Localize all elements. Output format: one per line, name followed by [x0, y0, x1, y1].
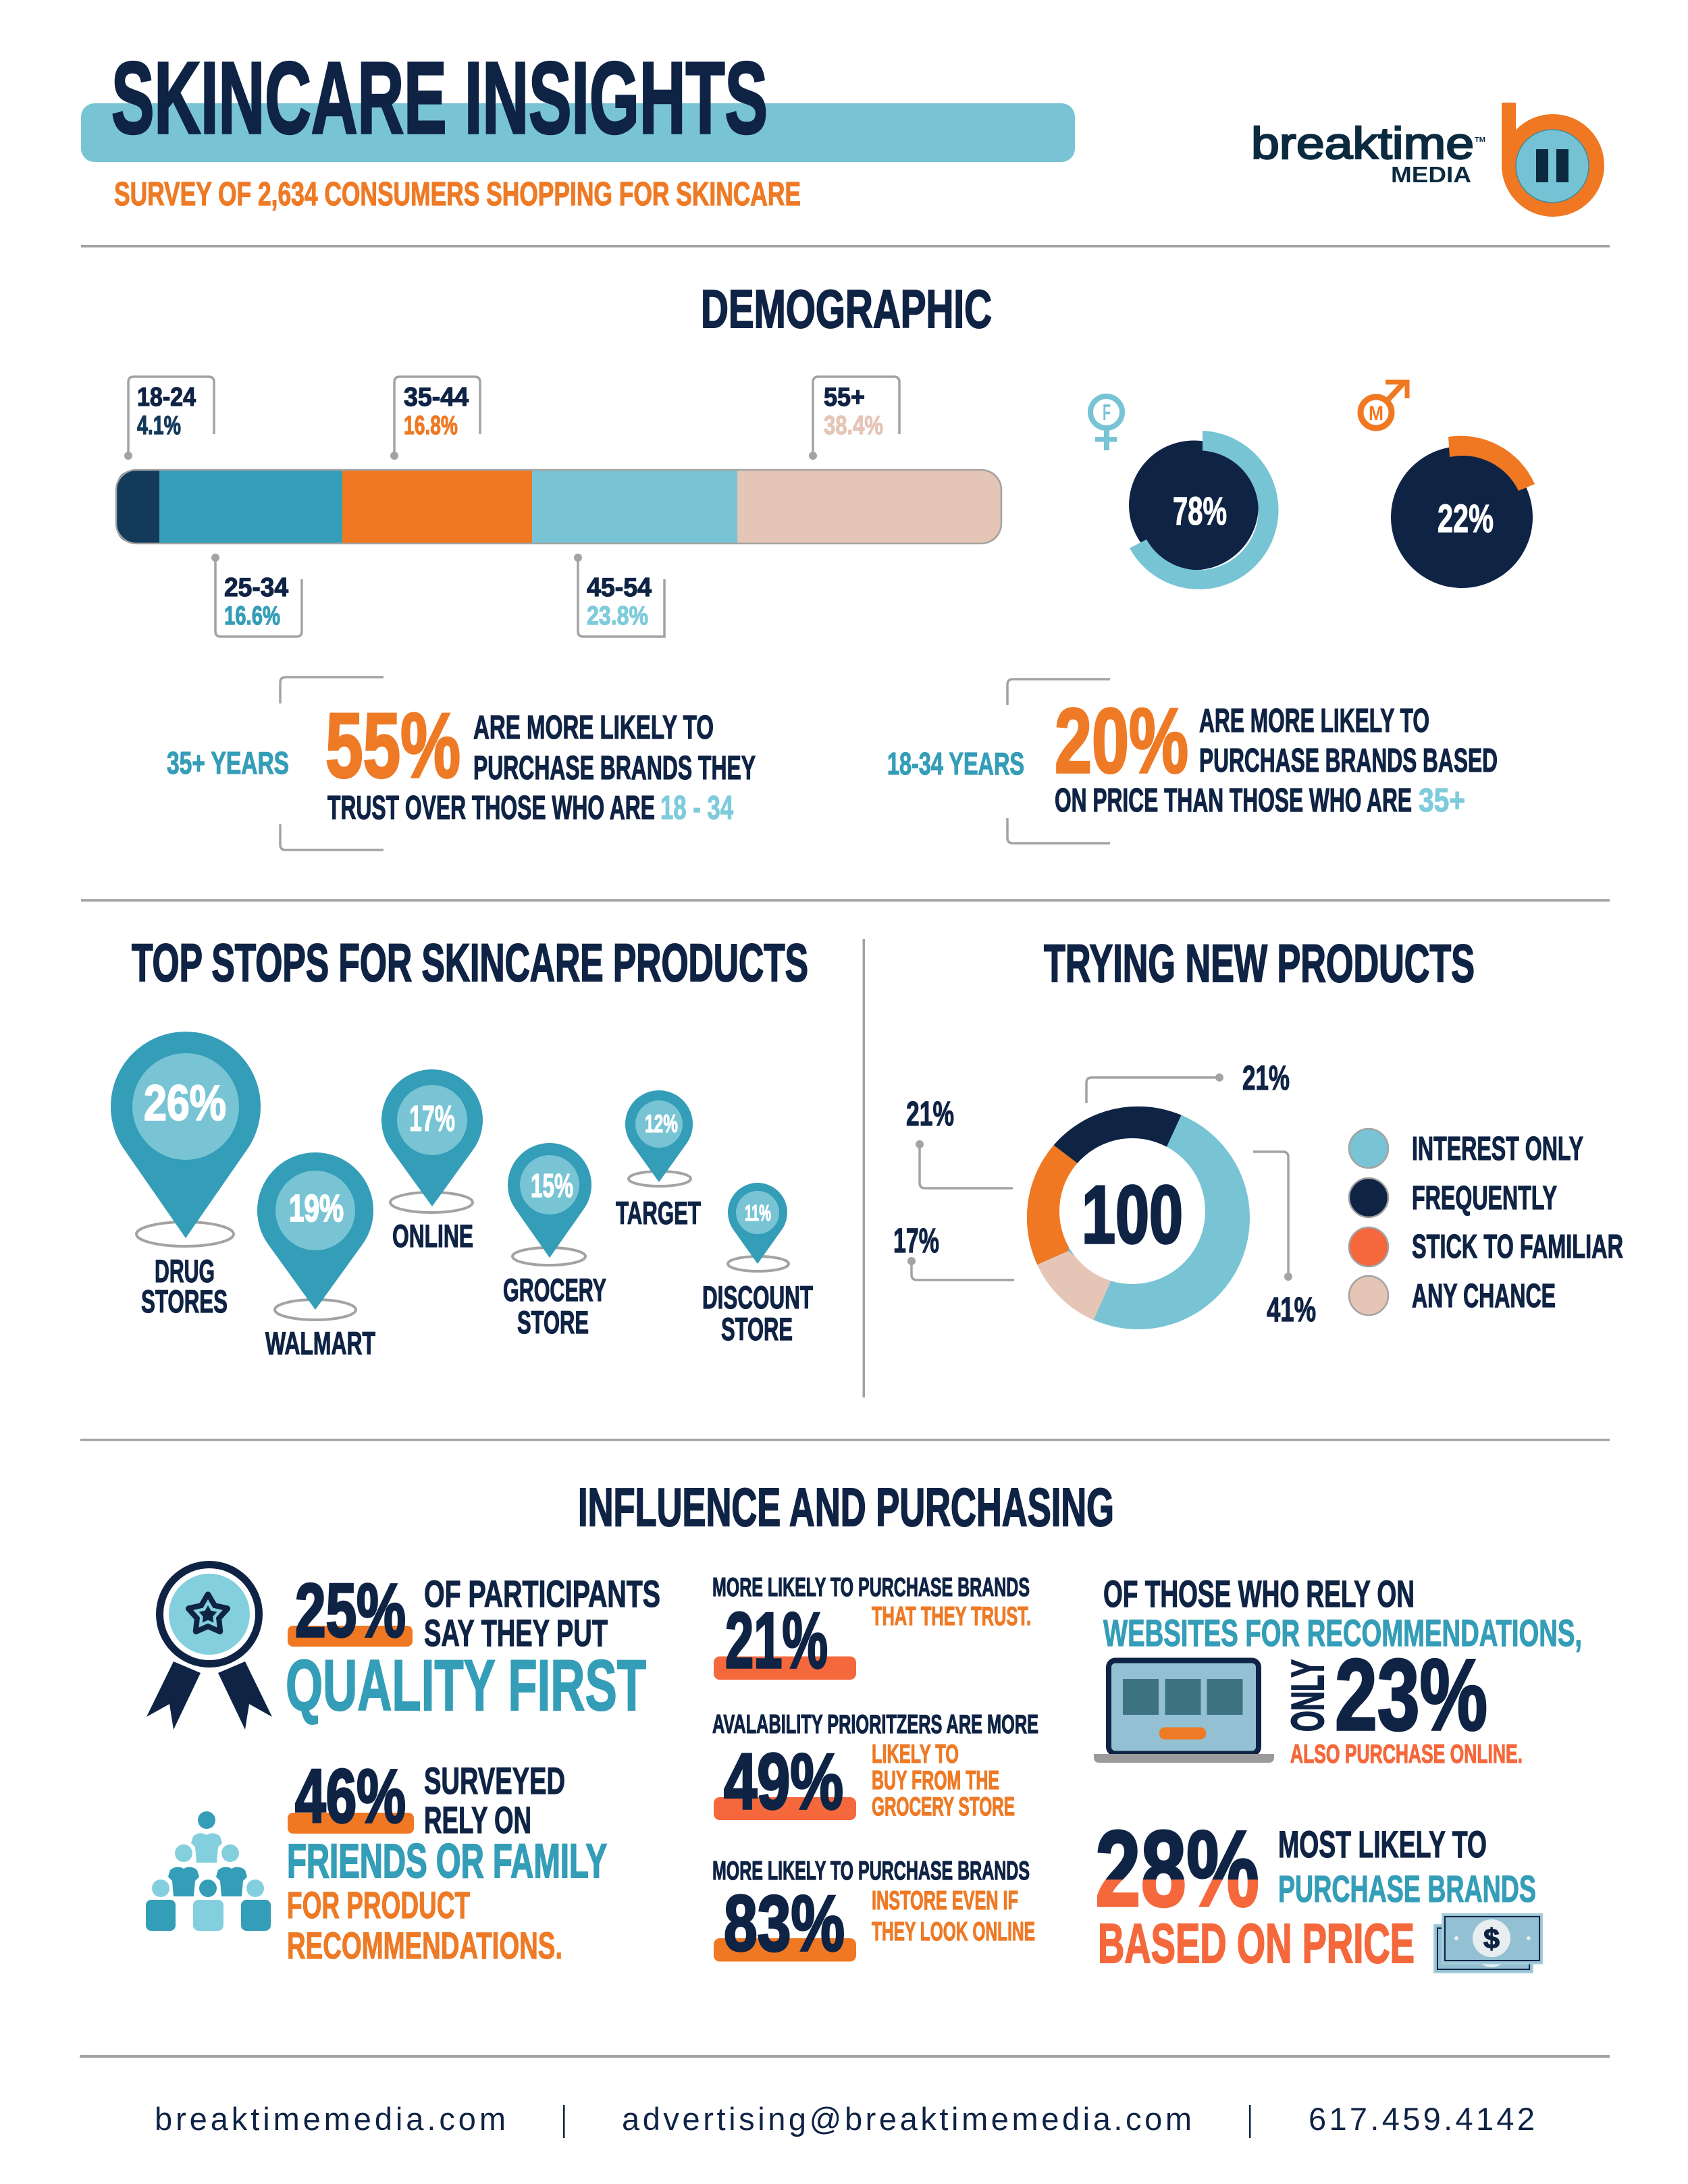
stat: 35+ years: ARE MORE LIKELY TO — [473, 710, 714, 746]
callout: 17% any chance: 17% — [893, 1221, 939, 1260]
callout: 18-24: 4.1% — [137, 411, 181, 440]
stat: 18-34 years: 35+ — [1419, 782, 1465, 819]
stat: 18-34 years: ON PRICE THAN THOSE WHO ARE — [1055, 782, 1412, 819]
callout: 25-34: 25-34 — [224, 573, 288, 602]
heading: top stops: TOP STOPS FOR SKINCARE PRODUCTS — [132, 932, 808, 992]
heading: trying new products: TRYING NEW PRODUCTS — [1044, 933, 1475, 993]
callout: 55+: 55+ — [824, 383, 865, 412]
subtitle: SURVEY OF 2,634 CONSUMERS SHOPPING FOR SKINCARE — [114, 176, 801, 213]
callout: 45-54: 23.8% — [587, 602, 648, 631]
stat: 46% friends or family: RECOMMENDATIONS. — [287, 1924, 562, 1967]
stat: websites heading — [1103, 1572, 1582, 1654]
stat: 46% friends or family — [287, 1754, 607, 1967]
pin: online — [381, 1069, 483, 1254]
female donut: 78% — [1173, 489, 1227, 533]
stat: 83% instore: 83% — [724, 1879, 845, 1967]
stat: 83% instore: MORE LIKELY TO PURCHASE BRANDS — [712, 1857, 1030, 1886]
footer contact line: advertising@breaktimemedia.com — [622, 2101, 1192, 2137]
icon: award ribbon — [147, 1561, 272, 1730]
callout: 18-24 — [124, 377, 214, 460]
stat: 21% trust — [712, 1573, 1031, 1684]
icon: male: M — [1369, 402, 1383, 425]
callout: 17% any chance — [893, 1221, 1014, 1280]
legend — [1349, 1129, 1623, 1315]
pin: target: TARGET — [616, 1195, 701, 1231]
stat: 46% friends or family: FOR PRODUCT — [287, 1884, 470, 1926]
callout: 25-34: 16.6% — [224, 602, 280, 631]
stat: websites heading: OF THOSE WHO RELY ON — [1103, 1572, 1415, 1615]
stat: 18-34 years: 20% — [1055, 689, 1188, 792]
heading: influence and purchasing: INFLUENCE AND PURCHASING — [578, 1477, 1114, 1537]
callout: 21% stick to familiar: 21% — [906, 1094, 954, 1133]
pin: discount store: DISCOUNT — [702, 1279, 813, 1315]
stat: 83% instore: INSTORE EVEN IF — [872, 1886, 1018, 1915]
callout: 21% stick to familiar — [906, 1094, 1013, 1188]
icon: laptop — [1094, 1661, 1274, 1763]
age bar chart — [116, 470, 1001, 543]
icon: female — [1090, 396, 1122, 450]
footer contact line: 617.459.4142 — [1309, 2101, 1535, 2137]
stat: only 23%: ONLY — [1282, 1659, 1334, 1732]
stat: only 23%: 23% — [1335, 1638, 1487, 1751]
pin: drug stores: 26% — [144, 1075, 226, 1131]
pin: grocery store: STORE — [517, 1304, 589, 1340]
icon: male — [1361, 382, 1407, 428]
stat: 35+ years: 55% — [325, 694, 460, 797]
stat: 83% instore: THEY LOOK ONLINE — [872, 1917, 1035, 1946]
stat: 21% trust: THAT THEY TRUST. — [872, 1602, 1031, 1631]
legend: FREQUENTLY — [1412, 1180, 1557, 1217]
stat: 35+ years: TRUST OVER THOSE WHO ARE — [327, 790, 655, 826]
stat: only 23% — [1282, 1638, 1523, 1769]
stat: 35+ years: 35+ YEARS — [167, 745, 289, 780]
callout: 41% interest only: 41% — [1267, 1290, 1316, 1329]
pin: target — [616, 1090, 701, 1231]
pin: grocery store: GROCERY — [503, 1272, 606, 1308]
male donut — [1391, 436, 1535, 588]
logo: TM — [1475, 136, 1485, 144]
stat: 49% grocery: LIKELY TO — [872, 1740, 959, 1769]
female donut — [1129, 431, 1278, 589]
stat: 28% based on price: BASED ON PRICE — [1098, 1912, 1415, 1975]
logo: MEDIA — [1391, 162, 1471, 187]
stat: 18-34 years: ARE MORE LIKELY TO — [1199, 703, 1429, 739]
pin: discount store: 11% — [745, 1200, 771, 1225]
pin: walmart: WALMART — [265, 1325, 375, 1361]
icon: group of people — [146, 1811, 271, 1931]
stat: 49% grocery: GROCERY STORE — [872, 1792, 1015, 1821]
callout: 55+ — [809, 377, 899, 460]
callout: 45-54 — [574, 554, 664, 637]
stat: 25% quality first: OF PARTICIPANTS — [424, 1572, 660, 1615]
pin: discount store: STORE — [721, 1311, 793, 1347]
callout: 35-44: 16.8% — [404, 411, 458, 440]
callout: 41% interest only — [1253, 1152, 1316, 1329]
callout: 25-34 — [211, 554, 302, 637]
stat: 18-34 years — [887, 679, 1498, 843]
pin: walmart — [257, 1152, 375, 1361]
icon: female: F — [1103, 400, 1111, 425]
stat: 21% trust: MORE LIKELY TO PURCHASE BRANDS — [712, 1573, 1030, 1602]
stat: 49% grocery: 49% — [724, 1737, 843, 1826]
stat: 35+ years: 18 - 34 — [660, 790, 733, 826]
legend: INTEREST ONLY — [1412, 1131, 1583, 1167]
callout: 55+: 38.4% — [824, 411, 883, 440]
stat: 28% based on price — [1095, 1808, 1536, 1975]
stat: 25% quality first: QUALITY FIRST — [286, 1645, 646, 1726]
pin: online: 17% — [409, 1098, 455, 1139]
male donut: 22% — [1438, 497, 1494, 541]
stat: 49% grocery — [712, 1710, 1038, 1826]
pin: grocery store: 15% — [531, 1168, 573, 1204]
footer contact line: breaktimemedia.com — [155, 2101, 506, 2137]
stat: 35+ years — [167, 677, 756, 850]
callout: 18-24: 18-24 — [137, 383, 196, 412]
logo — [1251, 103, 1604, 217]
stat: only 23%: ALSO PURCHASE ONLINE. — [1290, 1740, 1523, 1769]
title: SKINCARE INSIGHTS — [111, 41, 768, 155]
stat: 28% based on price: PURCHASE BRANDS — [1278, 1867, 1536, 1910]
stat: 25% quality first: SAY THEY PUT — [424, 1612, 608, 1654]
donut chart: 100 — [1082, 1169, 1183, 1260]
stat: 18-34 years: 18-34 YEARS — [887, 746, 1024, 781]
stat: 21% trust: 21% — [725, 1596, 828, 1684]
stat: 46% friends or family: SURVEYED — [424, 1759, 565, 1802]
stat: 35+ years: PURCHASE BRANDS THEY — [473, 750, 756, 787]
stat: 25% quality first — [286, 1568, 660, 1726]
pin: target: 12% — [645, 1110, 678, 1138]
stat: 25% quality first: 25% — [295, 1568, 406, 1653]
pin: discount store — [702, 1183, 813, 1347]
pin: online: ONLINE — [392, 1218, 473, 1254]
pin: drug stores: DRUG — [155, 1253, 215, 1289]
pin: drug stores: STORES — [141, 1283, 228, 1319]
title bar — [81, 103, 1075, 162]
pin: walmart: 19% — [289, 1187, 344, 1230]
icon: money bills: $ — [1483, 1923, 1500, 1954]
stat: 28% based on price: 28% — [1095, 1808, 1259, 1929]
stat: 28% based on price: MOST LIKELY TO — [1278, 1823, 1487, 1865]
logo wordmark: breaktime — [1251, 118, 1474, 168]
header — [81, 41, 1075, 213]
stat: 83% instore — [712, 1857, 1035, 1967]
stat: 18-34 years: PURCHASE BRANDS BASED — [1199, 743, 1498, 779]
callout: 35-44: 35-44 — [404, 383, 469, 412]
callout: 21% frequently — [1086, 1059, 1290, 1103]
icon: money bills — [1434, 1914, 1542, 1973]
stat: 46% friends or family: FRIENDS OR FAMILY — [287, 1835, 607, 1888]
stat: 49% grocery: AVALABILITY PRIORITZERS ARE MORE — [712, 1710, 1038, 1739]
logo icon — [1502, 103, 1604, 217]
pin: drug stores — [111, 1032, 261, 1319]
callout: 45-54: 45-54 — [587, 573, 652, 602]
stat: 46% friends or family: RELY ON — [424, 1799, 531, 1841]
stat: 49% grocery: BUY FROM THE — [872, 1766, 999, 1795]
callout: 35-44 — [390, 377, 480, 460]
legend: ANY CHANCE — [1412, 1278, 1556, 1314]
stat: 46% friends or family: 46% — [295, 1754, 406, 1838]
pin: grocery store — [503, 1143, 606, 1340]
heading: demographic: DEMOGRAPHIC — [701, 279, 992, 339]
footer contact line — [155, 2101, 1535, 2138]
callout: 21% frequently: 21% — [1242, 1059, 1290, 1097]
donut chart — [1027, 1107, 1250, 1329]
